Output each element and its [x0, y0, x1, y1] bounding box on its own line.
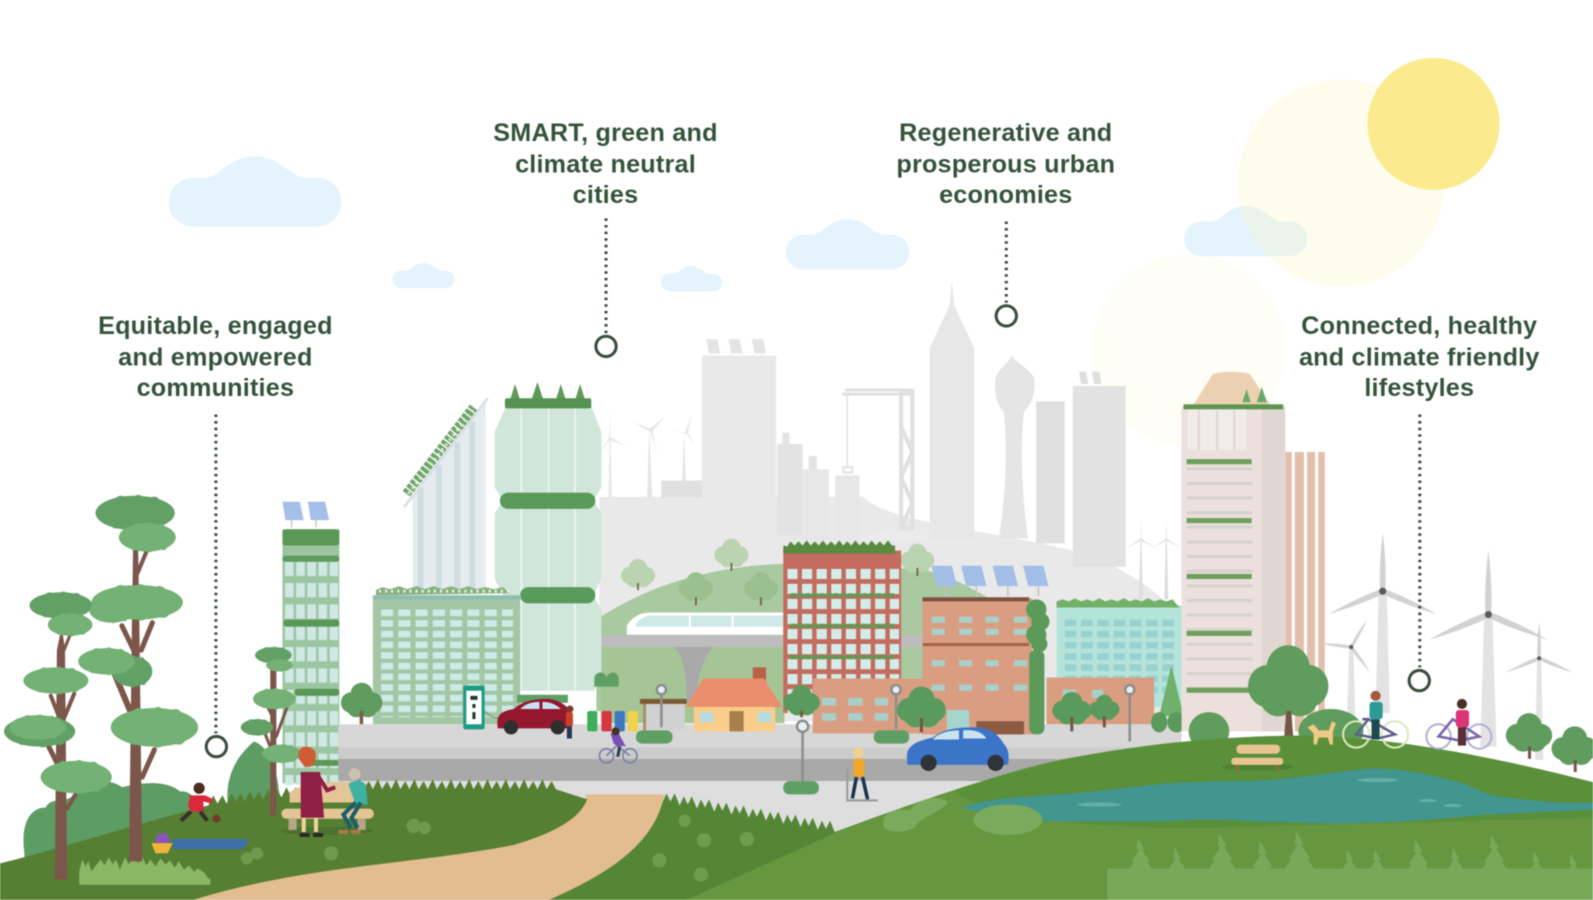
- pedestrian by red car: [566, 705, 574, 738]
- cyclist in pink: [1426, 699, 1491, 749]
- pointer: [596, 218, 616, 357]
- cyclist in teal: [1343, 691, 1408, 748]
- sun: [1367, 58, 1500, 190]
- label: [98, 312, 333, 402]
- pointer: [996, 221, 1016, 326]
- shrubs on middle hill: [652, 815, 754, 882]
- dark crowns: [4, 495, 292, 747]
- recycling bins: [587, 711, 638, 731]
- annotation: urban economies: [896, 119, 1115, 326]
- dirt path: [188, 794, 664, 900]
- back trees left: [23, 742, 279, 859]
- woman standing: [298, 747, 335, 835]
- trunks: [55, 549, 276, 880]
- tower roof trees: [505, 382, 591, 408]
- label: economies: [939, 181, 1073, 209]
- bridge pillar: [675, 647, 713, 706]
- skyline crane: [842, 390, 914, 528]
- tree near green building: [341, 683, 382, 724]
- EV charging station: [463, 686, 499, 729]
- label: climate neutral: [515, 151, 696, 179]
- elevated train and bridge: [601, 613, 922, 706]
- brick buildings: [813, 597, 1154, 734]
- green roof: [783, 540, 895, 554]
- label: Regenerative and: [899, 119, 1112, 147]
- low hedges: [517, 672, 909, 794]
- climbing ivy: [1026, 599, 1049, 734]
- distant small wind turbines: [1126, 520, 1182, 599]
- left meadow: [0, 779, 587, 900]
- bridge deck: [601, 635, 922, 647]
- annotation: healthy lifestyles: [1299, 312, 1540, 691]
- hill shrubs: [883, 798, 1042, 835]
- facade climbers: [790, 595, 894, 657]
- red brick apartment block: [783, 540, 901, 713]
- label: and climate friendly: [1299, 344, 1540, 372]
- annotation: equitable communities: [98, 312, 333, 757]
- foreground bushes bottom right: [1107, 831, 1593, 900]
- back bushes and trees on right hill: [1189, 645, 1593, 765]
- label: Connected, healthy: [1301, 312, 1537, 340]
- pointer: [1409, 414, 1429, 691]
- label: communities: [137, 374, 294, 402]
- label: SMART, green and: [493, 119, 718, 147]
- label: [896, 119, 1115, 209]
- road and pavements: [338, 724, 1182, 843]
- water highlights: [1077, 778, 1462, 807]
- grey city skyline: [599, 279, 1173, 721]
- house: [686, 667, 782, 731]
- street trees: [517, 665, 1186, 794]
- tree trunks right: [1284, 711, 1577, 772]
- hill trees: [621, 539, 934, 587]
- dark middle hill: [538, 793, 835, 900]
- label: [1299, 312, 1540, 402]
- seated man: [338, 768, 368, 832]
- meadow grass tufts: [79, 855, 210, 885]
- label: lifestyles: [1364, 374, 1474, 402]
- bench: [281, 782, 374, 830]
- dog: [1308, 721, 1336, 745]
- clouds: [169, 156, 1307, 291]
- cyclist on road: [599, 727, 637, 763]
- sun glow: [1092, 79, 1445, 447]
- sloped glass building: [404, 398, 488, 589]
- annotation: smart cities: [493, 119, 718, 357]
- picnic blanket and basket: [151, 833, 249, 853]
- left green tower with solar panels: [282, 502, 339, 785]
- green office building: [373, 586, 521, 724]
- skyline hill: [599, 497, 1173, 721]
- label: and empowered: [118, 344, 313, 372]
- vertical garden tower: [495, 382, 601, 691]
- sloped roof garden: [406, 407, 473, 494]
- pointer: [206, 414, 227, 757]
- teal glass building: [1057, 598, 1182, 707]
- label: cities: [573, 181, 638, 209]
- child on scooter: [846, 748, 878, 800]
- balcony planting: [1187, 459, 1252, 693]
- sky: [169, 58, 1500, 447]
- skyline towers: [702, 279, 1126, 567]
- cone tree: [1159, 665, 1184, 716]
- right hill light lower slope: [665, 790, 1593, 900]
- branches: [44, 550, 288, 809]
- door and garage: [947, 710, 1024, 734]
- light crowns: [9, 522, 301, 794]
- solar panel array: [932, 566, 1048, 596]
- right hill: [665, 735, 1593, 900]
- park bench with two people: [281, 747, 374, 835]
- child with ball: [181, 783, 220, 823]
- park bench right: [1221, 745, 1294, 771]
- left pine trees: [4, 495, 301, 880]
- label: prosperous urban: [896, 151, 1115, 179]
- train: [627, 613, 783, 635]
- blue car: [907, 727, 1009, 771]
- label: [493, 119, 718, 209]
- large wind turbines: [1318, 532, 1574, 760]
- bus shelter: [640, 699, 687, 730]
- brick windows: [932, 617, 1103, 698]
- tower planting bands: [500, 493, 595, 603]
- red car: [497, 699, 571, 734]
- street lamps: [657, 685, 1134, 782]
- label: Equitable, engaged: [98, 312, 333, 340]
- pale green hill with trees: [596, 539, 1016, 723]
- rooftop solar panels: [282, 502, 329, 527]
- tan residential tower: [1182, 372, 1325, 731]
- skyline turbines and factory: [600, 410, 702, 498]
- pond: [962, 769, 1593, 823]
- tower roof trees: [1242, 387, 1267, 402]
- meadow shrubs: [241, 819, 431, 864]
